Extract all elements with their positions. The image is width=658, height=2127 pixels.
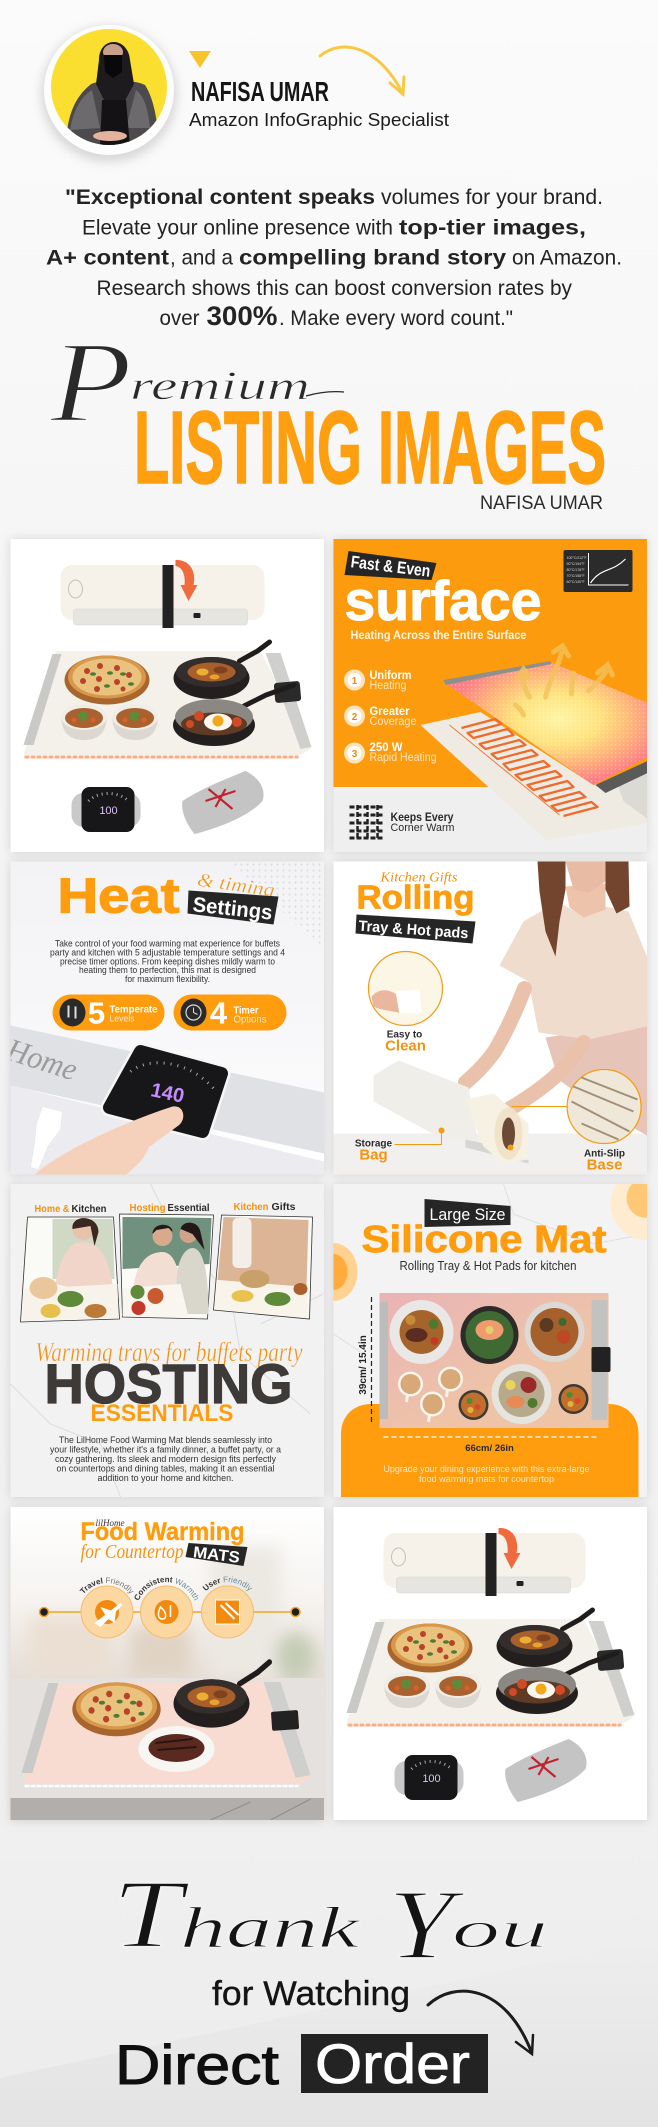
quote text block: top-tier images, [399,216,586,240]
quote text block: 300% [206,301,278,331]
description: on countertops and dining tables, making it an essential [56,1464,274,1474]
feature: travel friendly [79,1578,134,1638]
description [50,938,285,984]
feature 3 [344,742,436,764]
script: and timing: & timing [196,870,276,901]
description: party and kitchen with 5 adjustable temperature settings and 4 [50,948,285,958]
gift towel [505,1739,587,1802]
author avatar [41,25,177,162]
quote text block: on Amazon. [512,246,622,270]
heading: surface: surface [344,569,542,632]
script: thank you [112,1861,548,1980]
label: home and kitchen: Kitchen [72,1204,106,1215]
badge: 5 temperate levels [52,994,164,1030]
photo: woman at table [20,1217,120,1322]
tag: tray and hot pads: Tray & Hot pads [358,918,469,942]
finger [34,1106,183,1174]
feature: travel friendly: Travel Friendly [79,1578,134,1594]
control screen: 140 [149,1079,186,1108]
label: kitchen gifts: Gifts [272,1202,296,1213]
script: thank you: ou [452,1902,548,1959]
yellow curved arrow [320,47,404,94]
script: for countertop: for Countertop [80,1541,184,1563]
control panel: 100 [422,1773,441,1785]
feature 1 [344,668,412,692]
gift towel [182,771,264,834]
script: kitchen gifts: Kitchen Gifts [379,870,458,886]
device bar [10,1026,324,1174]
feature: consistent warmth: Consistent Warmth [134,1577,198,1600]
feature 3: 250 W [370,740,403,754]
pink warming mat [380,1293,610,1428]
description: addition to your home and kitchen. [98,1473,234,1483]
quote text block: . Make every word count." [279,307,513,330]
subtitle: Rolling Tray & Hot Pads for kitchen [400,1259,577,1273]
quote text block: Research shows this can boost conversion rates by [96,277,572,300]
height dimension: 39cm/ 15.4in [358,1335,369,1395]
yellow pointer triangle [189,51,211,68]
brand script on device: Home [1,1031,82,1087]
heading: Rolling: Rolling [356,878,474,916]
corner warm icon [350,805,384,840]
script: thank you: Y [388,1869,465,1980]
photo: kitchen gifts [214,1215,312,1319]
soup bowls [384,1672,481,1708]
feature 1: Uniform [370,668,412,682]
script heading: Premium: P [49,319,132,447]
direct: Direct [115,2033,279,2096]
food dishes [390,1300,588,1424]
steak plate [138,1726,214,1772]
description: heating them to perfection, this mat is designed [79,965,256,975]
feature: user friendly [201,1576,254,1638]
woman [466,862,647,1136]
panel: product overview [10,539,324,852]
marble counter [10,1678,324,1820]
pink warming mat [22,1682,310,1786]
label: easy to clean: Clean [385,1038,426,1054]
corner warm label: Keeps Every [390,812,454,824]
red rotation arrow [176,560,198,601]
heading: HOSTING: HOSTING [44,1352,292,1415]
quote text block: volumes for your brand. [381,186,603,209]
panel: fast and even surface [334,539,648,852]
wok [174,1662,270,1728]
description: food warming mats for countertop [419,1474,554,1484]
description [384,1464,590,1484]
frying pan with egg [496,1653,617,1714]
script heading: Premium [49,319,344,447]
quote text block: , and a [170,246,233,270]
inset: anti-slip base [512,1070,641,1144]
label: storage bag [355,1128,514,1164]
description: Upgrade your dining experience with this extra-large [384,1464,590,1474]
label: storage bag: Storage [355,1138,393,1150]
quote text block: compelling brand story [239,246,506,270]
panel: product overview repeat [334,1507,647,1820]
wok [174,642,270,699]
panel: food warming mats for countertop [10,1507,324,1820]
description: Take control of your food warming mat experience for buffets [55,938,280,948]
description: The LilHome Food Warming Mat blends seamlessly into [59,1435,272,1445]
control panel [394,1755,464,1800]
badge: 4 timer options: 4 [210,996,228,1030]
pizza [388,1624,472,1672]
flat warming mat [346,1619,634,1725]
heat arrows [516,646,612,715]
corner warm label: Corner Warm [390,822,454,834]
label: home and kitchen: Home & [34,1204,70,1215]
temperature graph: 60°C/140°F [566,580,585,584]
panel: hosting essentials [10,1184,324,1497]
flat warming mat [24,651,312,757]
temperature graph: 100°C/212°F [566,556,587,560]
feature timeline [40,1608,300,1616]
inset: easy to clean [368,952,442,1026]
pizza [64,656,150,704]
tag: large size [424,1199,510,1227]
tag: mats: MATS [192,1544,241,1567]
badge: 5 temperate levels: Temperate [110,1004,158,1016]
script: warming trays: Warming trays for buffets party [36,1337,303,1367]
badge: 5 temperate levels: 5 [88,996,105,1030]
feature 2: 2 [352,712,358,723]
label: anti-slip base: Anti-Slip [584,1148,625,1160]
description: precise timer options. From keeping dishes mildly warm to [60,956,275,966]
power plug [30,1106,62,1170]
photo: couple at table [120,1214,214,1319]
author name: NAFISA UMAR [191,76,329,107]
description: your lifestyle, whether it's a family dinner, a buffet party, or a [50,1444,281,1454]
control screen [110,1052,222,1132]
feature 2 [344,704,416,728]
curved black arrow [428,1991,533,2054]
feature 1: 1 [352,676,358,687]
tag: settings: Settings [192,893,274,925]
pizza [72,1682,161,1736]
label: easy to clean: Easy to [387,1030,422,1040]
panel: large size silicone mat [310,1168,658,1497]
author role: Amazon InfoGraphic Specialist [189,109,449,130]
feature 2: Greater [370,704,410,718]
for watching: for Watching [212,1975,410,2013]
order tag: Order [315,2032,470,2095]
label: hosting essential: Hosting [130,1203,166,1214]
temperature graph: 90°C/194°F [566,562,585,566]
tag: fast and even: Fast & Even [350,552,431,581]
temperature graph: 70°C/158°F [566,574,585,578]
brand script: lilHome [96,1518,125,1528]
label: anti-slip base [584,1148,625,1174]
heading: Heat: Heat [58,870,180,924]
description: cozy gathering. Its sleek and modern design fits perfectly [55,1454,276,1464]
feature: consistent warmth [134,1577,198,1638]
badge: 4 timer options: Options [234,1014,266,1026]
frying pan with egg [173,685,294,746]
feature 3: 3 [352,749,358,760]
heading: silicone mat: Silicone Mat [362,1219,607,1261]
feature 3: Rapid Heating [370,752,436,764]
corner warm label [391,812,454,831]
quote text block: "Exceptional content speaks [65,186,375,209]
feature 2: Coverage [370,716,416,728]
badge: 4 timer options: Timer [234,1004,258,1016]
tag: mats [186,1543,248,1567]
subtitle: Heating Across the Entire Surface [350,628,527,642]
mat cutaway with coil [420,661,648,840]
label: hosting essential: Essential [168,1203,210,1214]
width dimension: 66cm/ 26in [465,1443,514,1454]
badge: 4 timer options [174,994,286,1030]
temperature graph: 80°C/176°F [566,568,585,572]
label: anti-slip base: Base [587,1156,622,1174]
rolled mat [60,565,264,628]
red rotation arrow [498,1528,520,1569]
quote text block: Elevate your online presence with [82,216,393,240]
counter top [334,1134,647,1174]
panel: heat and timing settings [1,862,324,1174]
script: thank you: T [112,1861,190,1969]
panel: rolling tray and hot pads [334,862,647,1174]
soup bowls [61,708,158,740]
script: thank you: hank [180,1895,361,1960]
byline: NAFISA UMAR [480,493,603,514]
label: easy to clean [385,1030,426,1054]
control panel: 100 [99,805,118,817]
quote text block: over [160,307,200,330]
feature 1: Heating [370,680,406,692]
decorative circles [310,1168,658,1301]
label: kitchen gifts: Kitchen [234,1202,268,1213]
heading: ESSENTIALS: ESSENTIALS [90,1400,234,1427]
badge: 5 temperate levels: Levels [110,1014,135,1024]
description [50,1435,281,1483]
orange base block [341,1404,638,1497]
quote text block: A+ content [46,246,169,270]
feature: user friendly: User Friendly [202,1576,252,1591]
script heading: Premium: remium [130,363,310,408]
control panel [72,787,140,832]
closing section backdrop [0,1938,658,2127]
quote text block [46,186,622,331]
height dimension [358,1297,372,1425]
panel shadows [10,539,647,1821]
description: for maximum flexibility. [125,974,210,984]
tag: large size: Large Size [430,1205,506,1224]
rolled mat with storage bag [374,1060,528,1164]
label: storage bag: Bag [359,1146,388,1164]
temperature graph [564,550,632,592]
heading: food warming: Food Warming [80,1518,244,1546]
rolled mat [384,1533,586,1596]
wok [496,1610,592,1667]
